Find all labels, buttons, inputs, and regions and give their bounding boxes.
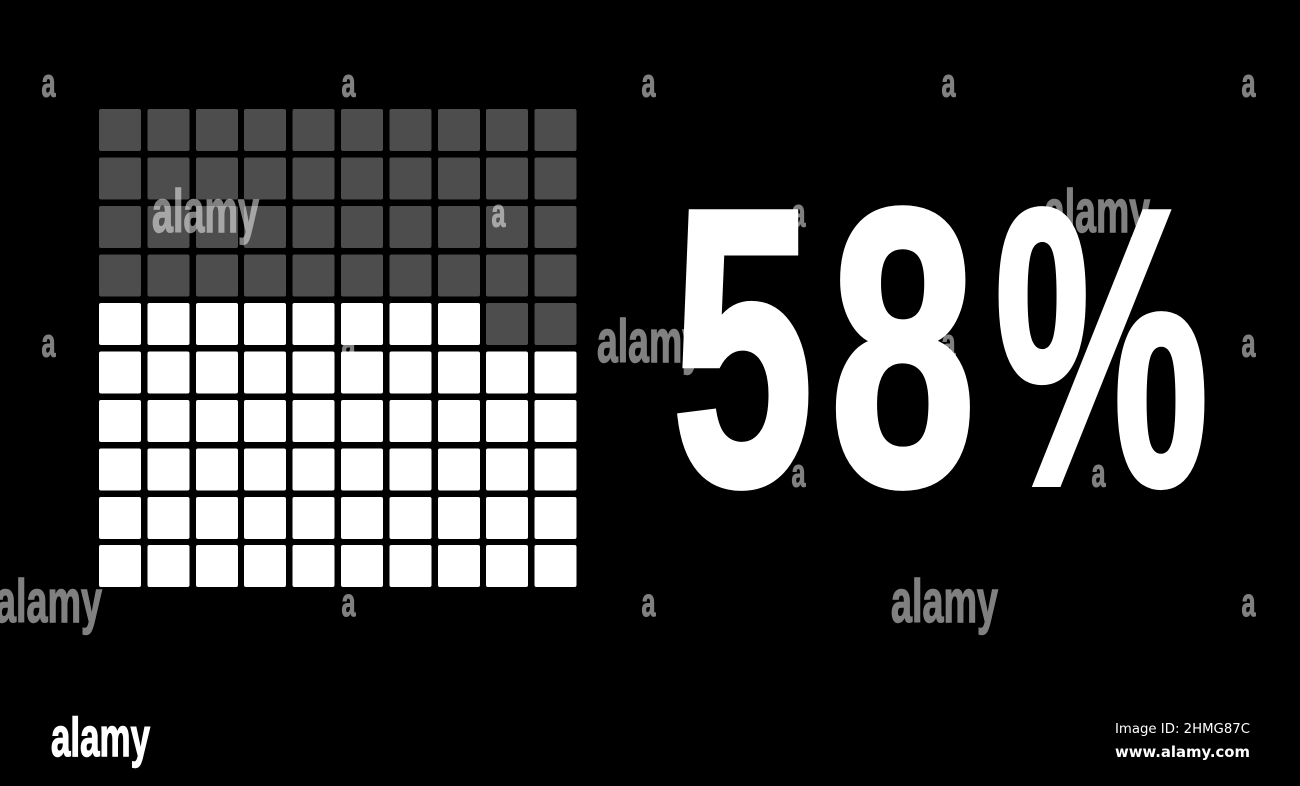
watermarks: alamy: [597, 308, 703, 375]
watermarks: alamy: [0, 568, 102, 635]
watermarks: a: [342, 62, 356, 106]
website caption: www.alamy.com: [1115, 743, 1250, 761]
percentage value: 58%: 5: [672, 128, 814, 568]
watermarks: a: [942, 62, 956, 106]
percentage value: 58%: [672, 128, 1209, 569]
percentage value: 58%: 8: [830, 128, 976, 569]
watermarks: a: [342, 322, 356, 366]
logo: alamy: alamy: [51, 706, 150, 768]
filled squares: [99, 303, 576, 587]
image id caption: Image ID: 2HMG87C: [1115, 721, 1250, 737]
watermarks: a: [792, 452, 806, 496]
watermarks: a: [1242, 62, 1256, 106]
waffle chart: 58 of 100 squares filled: [99, 109, 576, 587]
watermarks: a: [492, 192, 506, 236]
watermarks: a: [42, 322, 56, 366]
watermarks: a: [342, 581, 356, 625]
unfilled squares: [99, 109, 576, 345]
percentage value: 58%: %: [994, 128, 1209, 568]
watermarks: a: [1092, 452, 1106, 496]
watermarks: alamy: [1044, 178, 1150, 245]
watermarks: a: [642, 62, 656, 106]
watermarks: a: [792, 192, 806, 236]
watermarks: alamy: [891, 568, 998, 635]
watermarks: a: [942, 322, 956, 366]
watermarks: a: [1242, 322, 1256, 366]
watermarks: a: [42, 62, 56, 106]
watermarks: [0, 62, 1256, 635]
watermarks: a: [642, 581, 656, 625]
watermarks: a: [1242, 581, 1256, 625]
watermarks: alamy: [152, 178, 259, 245]
